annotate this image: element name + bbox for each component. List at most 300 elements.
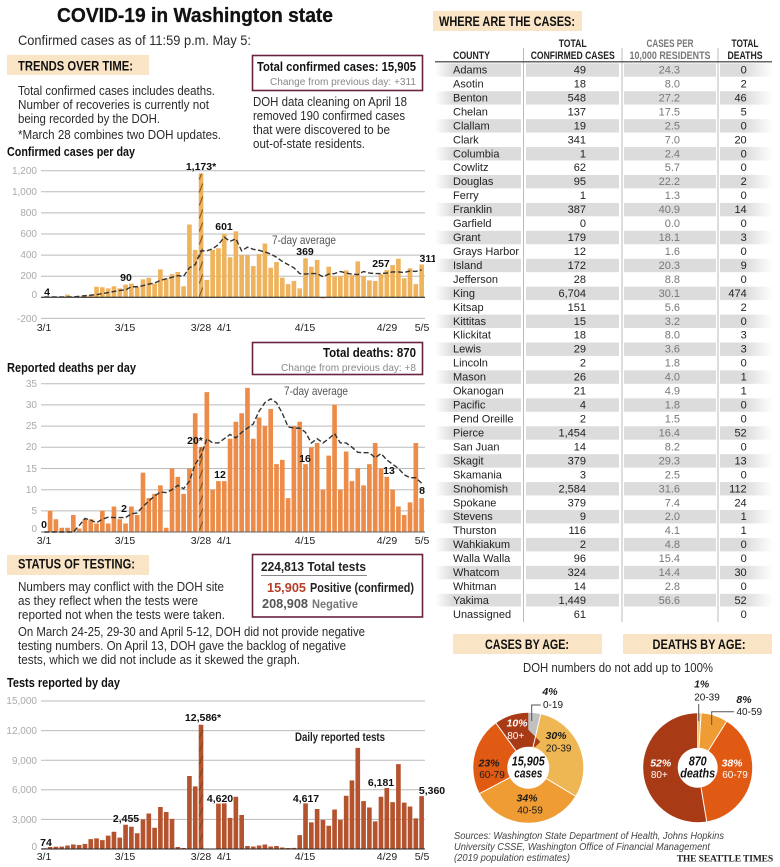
row: Clallam: Clallam <box>453 120 490 132</box>
row: Wahkiakum: 4.8 <box>665 539 680 551</box>
label: 30% 20-39: 30% <box>545 730 567 742</box>
note: DOH numbers: DOH numbers do not add up to 100% <box>523 661 713 675</box>
text block: trends notes <box>18 83 221 142</box>
label: 8% 40-59: 8% <box>736 694 752 706</box>
label: 23% 60-79: 23% <box>477 758 500 770</box>
row: Franklin: 14 <box>734 204 747 216</box>
table header: COUNTY <box>453 50 491 62</box>
text block: testing notes: On March 24-25, 29-30 and April 5-12, DOH did not provide negative <box>18 624 365 639</box>
heading: cases by age: CASES BY AGE: <box>485 636 569 652</box>
row: Lincoln: Lincoln <box>453 358 488 370</box>
row: Stevens: 1 <box>741 511 747 523</box>
row: Kittitas: 3.2 <box>665 316 680 328</box>
data labels: 90 <box>120 272 132 284</box>
label: 10% 80+: 80+ <box>507 731 524 742</box>
row: Ferry: 0 <box>741 190 747 202</box>
y axis labels: 15 <box>26 464 37 475</box>
row: Clark: Clark <box>453 134 479 146</box>
callout: total tests: 208,908 <box>262 596 308 611</box>
table: county data <box>435 38 773 622</box>
text block: DOH data cleaning: that were discovered to be <box>253 122 390 137</box>
row: Kitsap: 5.6 <box>665 302 680 314</box>
row: Garfield: 0 <box>580 218 586 230</box>
row: Columbia: 0 <box>741 148 747 160</box>
callout: total confirmed cases <box>252 56 422 90</box>
row: Kittitas <box>453 316 747 328</box>
leader line: 40-59 <box>712 712 734 725</box>
row: Stevens: Stevens <box>453 511 493 523</box>
row: Adams <box>453 64 747 76</box>
text block: testing notes: reported not when the tests were taken. <box>18 607 225 622</box>
row: Asotin: Asotin <box>453 78 484 90</box>
row: Lincoln: 1.8 <box>665 358 680 370</box>
row: Okanogan: 21 <box>574 386 586 398</box>
row: Grays Harbor: Grays Harbor <box>453 246 519 258</box>
row: Lincoln: 2 <box>580 358 586 370</box>
y axis labels: 9,000 <box>12 756 37 767</box>
label: 34% 40-59 <box>516 793 543 817</box>
text block: testing notes: tests, which we did not include as it skewed the graph. <box>18 652 300 667</box>
chart heading: tests reported by day: Tests reported by day <box>7 675 121 690</box>
row: Stevens: 9 <box>580 511 586 523</box>
row: Columbia <box>453 148 747 160</box>
data labels: 6,181 <box>368 777 394 789</box>
row: Kitsap: Kitsap <box>453 302 484 314</box>
data labels: 4,617 <box>293 793 319 805</box>
row: Whatcom: Whatcom <box>453 567 499 579</box>
row: Yakima: 56.6 <box>659 595 680 607</box>
row: Kittitas: 15 <box>574 316 586 328</box>
row: Adams: Adams <box>453 64 488 76</box>
row: Pacific: 4 <box>580 400 586 412</box>
source note: (2019 population estimates) <box>454 852 570 864</box>
row: Pacific: 0 <box>741 400 747 412</box>
row: Ferry: 1 <box>580 190 586 202</box>
callout: total tests: Positive (confirmed) <box>310 581 414 595</box>
row: Wahkiakum: Wahkiakum <box>453 539 510 551</box>
row: Skamania: 3 <box>580 469 586 481</box>
heading: trends over time: TRENDS OVER TIME: <box>18 58 133 74</box>
row: Island: 172 <box>568 260 586 272</box>
data labels: 601 <box>215 221 233 233</box>
y axis labels: 1,200 <box>12 166 37 177</box>
callout: total deaths <box>252 342 422 374</box>
row: Garfield <box>453 218 747 230</box>
row: Grant: 18.1 <box>659 232 680 244</box>
bars <box>50 388 422 532</box>
row: Chelan <box>453 106 747 118</box>
row: Whitman <box>453 581 747 593</box>
row: Benton: 46 <box>734 92 747 104</box>
row: Franklin: 40.9 <box>659 204 680 216</box>
data labels: 4,620 <box>207 793 233 805</box>
row: Whitman: 0 <box>741 581 747 593</box>
row: Whitman: Whitman <box>453 581 496 593</box>
y axis labels: 15,000 <box>6 696 37 707</box>
row: Douglas: 2 <box>741 176 747 188</box>
row: San Juan: 14 <box>574 441 586 453</box>
table header: CASES PER <box>646 38 694 50</box>
row: King: 30.1 <box>659 288 680 300</box>
row: Stevens <box>453 511 747 523</box>
data labels: 8 <box>419 485 425 497</box>
row: Pierce: 1,454 <box>558 428 586 440</box>
center label: 15,905 cases: 15,905 <box>512 755 546 769</box>
row: Okanogan: Okanogan <box>453 386 504 398</box>
row: Yakima: 52 <box>734 595 747 607</box>
row: Pierce: 16.4 <box>659 428 680 440</box>
7-day average line <box>44 399 422 532</box>
x axis labels: 4/1 <box>217 322 231 334</box>
row: Benton: 548 <box>568 92 586 104</box>
row: Lewis: 29 <box>574 344 586 356</box>
chart heading: confirmed cases per day: Confirmed cases per day <box>7 144 136 159</box>
heading: status of testing <box>7 555 149 575</box>
x axis labels: 4/15 <box>295 851 315 863</box>
label: 4% 0-19: 0-19 <box>543 700 563 711</box>
title: COVID-19 in Washington state <box>57 4 333 27</box>
row: Mason: 26 <box>574 372 586 384</box>
table header: 10,000 RESIDENTS <box>630 50 710 62</box>
heading: where are the cases <box>433 11 582 31</box>
label: 8% 40-59 <box>736 694 763 718</box>
credit: The Seattle Times: THE SEATTLE TIMES <box>677 855 773 865</box>
table header: TOTAL <box>732 38 759 50</box>
data labels: 74 <box>40 837 52 849</box>
leader line: 0-19 <box>532 705 541 721</box>
label: 30% 20-39 <box>545 730 572 755</box>
callout: total deaths: Total deaths: 870 <box>323 345 416 360</box>
row: Asotin: 8.0 <box>665 78 680 90</box>
row: Clallam: 0 <box>741 120 747 132</box>
center label: 15,905 cases <box>512 755 546 781</box>
row: Clark: 7.0 <box>665 134 680 146</box>
row: Pierce <box>453 428 747 440</box>
data labels: 0 <box>41 519 47 531</box>
heading: trends over time <box>7 55 149 75</box>
subtitle: Confirmed cases as of 11:59 p.m. May 5: <box>18 32 251 48</box>
row: Cowlitz: 62 <box>574 162 586 174</box>
row: Unassigned <box>453 609 747 621</box>
row: San Juan: 8.2 <box>665 441 680 453</box>
data labels: 2,455 <box>113 813 139 825</box>
row: Yakima: Yakima <box>453 595 490 607</box>
row: Grays Harbor: 12 <box>574 246 586 258</box>
row: Lewis: 3 <box>741 344 747 356</box>
row: Unassigned: 61 <box>574 609 586 621</box>
bars <box>44 174 422 298</box>
row: Stevens: 2.0 <box>665 511 680 523</box>
row: Pend Oreille: 2 <box>580 414 586 426</box>
label: 34% 40-59: 40-59 <box>517 806 543 817</box>
heading: deaths by age: DEATHS BY AGE: <box>652 636 746 652</box>
row: Clark <box>453 134 747 146</box>
label: 52% 80+: 52% <box>650 758 672 770</box>
row: Klickitat: 18 <box>574 330 586 342</box>
row: Island: 20.3 <box>659 260 680 272</box>
row: Kittitas: Kittitas <box>453 316 487 328</box>
y axis labels: 12,000 <box>6 726 37 737</box>
row: Benton <box>453 92 747 104</box>
row: San Juan: San Juan <box>453 441 499 453</box>
row: Columbia: Columbia <box>453 148 500 160</box>
row: Mason <box>453 372 747 384</box>
row: Thurston: 1 <box>741 525 747 537</box>
row: Jefferson: Jefferson <box>453 274 498 286</box>
row: Grays Harbor: 0 <box>741 246 747 258</box>
row: San Juan <box>453 441 747 453</box>
y axis labels: 10 <box>26 485 37 496</box>
row: Clallam: 19 <box>574 120 586 132</box>
row: Chelan: 5 <box>741 106 747 118</box>
row: Whatcom: 30 <box>734 567 747 579</box>
data labels: 1,173* <box>186 161 217 173</box>
leader line: 20-39 <box>698 704 700 721</box>
row: Spokane <box>453 497 747 509</box>
callout: total tests <box>252 554 422 617</box>
row: Whitman: 14 <box>574 581 586 593</box>
y axis labels: 5 <box>31 506 37 517</box>
y axis labels: 25 <box>26 421 37 432</box>
y axis labels: 0 <box>31 290 37 301</box>
row: Island <box>453 260 747 272</box>
row: Skamania: 0 <box>741 469 747 481</box>
x axis labels: 4/15 <box>295 322 315 334</box>
row: Pacific <box>453 400 747 412</box>
row: Mason: 4.0 <box>665 372 680 384</box>
row: Wahkiakum: 0 <box>741 539 747 551</box>
x axis labels: 3/15 <box>115 322 135 334</box>
y axis labels <box>6 696 37 853</box>
center label: 870 deaths <box>680 755 715 781</box>
center label: 870 deaths: deaths <box>680 767 715 781</box>
callout: total tests: Negative <box>312 597 358 611</box>
row: Jefferson <box>453 274 747 286</box>
row: Skagit: 379 <box>568 455 586 467</box>
row: Douglas <box>453 176 747 188</box>
row: Columbia: 1 <box>580 148 586 160</box>
row: Okanogan: 4.9 <box>665 386 680 398</box>
row: Spokane: Spokane <box>453 497 496 509</box>
data labels: 16 <box>299 453 311 465</box>
row: Grays Harbor: 1.6 <box>665 246 680 258</box>
row: Skagit <box>453 455 747 467</box>
table header: CONFIRMED CASES <box>531 50 615 62</box>
text block: trends notes: Number of recoveries is currently not <box>18 97 209 112</box>
row: Adams: 49 <box>574 64 586 76</box>
x axis labels: 4/29 <box>377 535 397 547</box>
row: Cowlitz: 0 <box>741 162 747 174</box>
row: Clark: 20 <box>734 134 747 146</box>
heading: where are the cases: WHERE ARE THE CASES: <box>439 13 575 29</box>
row: Snohomish: 2,584 <box>558 483 586 495</box>
y axis labels <box>12 166 37 325</box>
text block: testing notes: testing numbers. On April 13, DOH gave the backlog of negative <box>18 638 346 653</box>
row: Spokane: 7.4 <box>665 497 680 509</box>
row: Lewis: 3.6 <box>665 344 680 356</box>
row: Walla Walla: 96 <box>574 553 586 565</box>
row: Adams: 24.3 <box>659 64 680 76</box>
row: Wahkiakum: 2 <box>580 539 586 551</box>
text block: testing notes <box>18 579 365 667</box>
label: 23% 60-79 <box>477 758 505 781</box>
row: Asotin: 18 <box>574 78 586 90</box>
row: Yakima: 1,449 <box>558 595 586 607</box>
y axis labels: 30 <box>26 400 37 411</box>
row: Yakima <box>453 595 747 607</box>
row: Pend Oreille <box>453 414 747 426</box>
row: Skamania <box>453 469 747 481</box>
row: Snohomish: Snohomish <box>453 483 508 495</box>
row: Grant <box>453 232 747 244</box>
row: Spokane: 379 <box>568 497 586 509</box>
row: Skamania: Skamania <box>453 469 503 481</box>
row: Kitsap <box>453 302 747 314</box>
row: Island: Island <box>453 260 482 272</box>
row: Chelan: 17.5 <box>659 106 680 118</box>
label: 23% 60-79: 60-79 <box>479 770 505 781</box>
label: 1% 20-39 <box>694 679 720 703</box>
row: Asotin <box>453 78 747 90</box>
row: Cowlitz: 5.7 <box>665 162 680 174</box>
row: Whitman: 2.8 <box>665 581 680 593</box>
row: Okanogan <box>453 386 747 398</box>
label: 7-day average: 7-day average <box>284 384 348 398</box>
row: Garfield: Garfield <box>453 218 492 230</box>
row: Franklin: Franklin <box>453 204 492 216</box>
row: Garfield: 0.0 <box>665 218 680 230</box>
label: 38% 60-79: 38% <box>721 758 743 770</box>
row: Skamania: 2.5 <box>665 469 680 481</box>
row: Whatcom <box>453 567 747 579</box>
source note: Sources: Washington State Department of Health, Johns Hopkins <box>454 830 725 842</box>
bars <box>44 725 422 849</box>
table header: TOTAL <box>559 38 587 50</box>
y axis labels: 400 <box>20 250 37 261</box>
table header <box>453 38 762 62</box>
callout: total deaths: Change from previous day: +8 <box>281 362 416 374</box>
x axis labels: 5/5 <box>415 535 429 547</box>
row: Jefferson: 0 <box>741 274 747 286</box>
chart heading: reported deaths per day: Reported deaths per day <box>7 360 137 375</box>
text block: trends notes: being recorded by the DOH. <box>18 111 160 126</box>
x axis labels: 3/28 <box>191 322 211 334</box>
y axis labels: 200 <box>20 271 37 282</box>
text block: DOH data cleaning <box>253 94 407 151</box>
text block: DOH data cleaning: removed 190 confirmed cases <box>253 108 405 123</box>
row: King: 6,704 <box>558 288 586 300</box>
x axis labels: 3/15 <box>115 851 135 863</box>
text block: testing notes: as they reflect when the tests were <box>18 593 198 608</box>
row: Clallam: 2.5 <box>665 120 680 132</box>
row: Thurston: 4.1 <box>665 525 680 537</box>
x axis labels: 5/5 <box>415 851 429 863</box>
row: Asotin: 2 <box>741 78 747 90</box>
row: Jefferson: 8.8 <box>665 274 680 286</box>
x axis labels: 4/29 <box>377 851 397 863</box>
row: Cowlitz: Cowlitz <box>453 162 488 174</box>
label: 38% 60-79 <box>721 758 748 781</box>
data labels: 369 <box>296 246 314 258</box>
row: Walla Walla <box>453 553 747 565</box>
row: Thurston <box>453 525 747 537</box>
row: Snohomish: 31.6 <box>659 483 680 495</box>
label: 10% 80+ <box>506 718 528 742</box>
heading: cases by age <box>453 634 602 654</box>
row: Columbia: 2.4 <box>665 148 680 160</box>
row: Benton: Benton <box>453 92 488 104</box>
row: Pacific: 1.8 <box>665 400 680 412</box>
row: Thurston: 116 <box>568 525 586 537</box>
row: Whatcom: 14.4 <box>659 567 680 579</box>
label: 1% 20-39: 20-39 <box>694 692 720 703</box>
callout: total confirmed cases: Total confirmed cases: 15,905 <box>257 59 416 74</box>
data labels: 311 <box>420 253 437 265</box>
table header: DEATHS <box>728 50 762 62</box>
callout: total tests: 224,813 Total tests <box>261 559 366 574</box>
row: Okanogan: 1 <box>741 386 747 398</box>
row: Klickitat <box>453 330 747 342</box>
data labels: 2 <box>121 503 127 515</box>
row: Douglas: 95 <box>574 176 586 188</box>
center label: 15,905 cases: cases <box>514 767 542 781</box>
callout: total tests: 15,905 <box>267 580 306 595</box>
row: Klickitat: 8.0 <box>665 330 680 342</box>
x axis labels: 3/1 <box>37 535 51 547</box>
label: 1% 20-39: 1% <box>694 679 710 691</box>
text block: testing notes: Numbers may conflict with the DOH site <box>18 579 224 594</box>
heading: status of testing: STATUS OF TESTING: <box>18 556 135 572</box>
source note <box>454 830 725 864</box>
row: Lincoln <box>453 358 747 370</box>
row: Kitsap: 2 <box>741 302 747 314</box>
7-day average line <box>44 237 422 297</box>
row: Thurston: Thurston <box>453 525 496 537</box>
y axis labels: 1,000 <box>12 187 37 198</box>
x axis labels <box>37 322 429 334</box>
chart: reported deaths per day <box>26 379 429 547</box>
row: Garfield: 0 <box>741 218 747 230</box>
data labels: 4 <box>44 286 50 298</box>
row: Skagit: 13 <box>734 455 747 467</box>
data labels <box>41 435 425 531</box>
row: Grant: 179 <box>568 232 586 244</box>
y axis labels: 0 <box>31 524 37 535</box>
row: Clallam <box>453 120 747 132</box>
y axis labels: 800 <box>20 208 37 219</box>
row: Kitsap: 151 <box>568 302 586 314</box>
row: Klickitat: 3 <box>741 330 747 342</box>
row: Whatcom: 324 <box>568 567 586 579</box>
row: Wahkiakum <box>453 539 747 551</box>
y axis labels: 600 <box>20 229 37 240</box>
row: Pacific: Pacific <box>453 400 486 412</box>
row: Walla Walla: Walla Walla <box>453 553 511 565</box>
x axis labels: 3/28 <box>191 851 211 863</box>
data labels: 12,586* <box>185 712 222 724</box>
row: Unassigned: Unassigned <box>453 609 511 621</box>
text block: DOH data cleaning: out-of-state residents. <box>253 136 365 151</box>
row: Lincoln: 0 <box>741 358 747 370</box>
row: Ferry: Ferry <box>453 190 479 202</box>
label: 4% 0-19 <box>541 686 563 711</box>
y axis labels: 6,000 <box>12 785 37 796</box>
x axis labels <box>37 851 429 863</box>
row: Skagit: Skagit <box>453 455 484 467</box>
data labels <box>40 712 445 849</box>
row: Pierce: 52 <box>734 428 747 440</box>
label: 30% 20-39: 20-39 <box>546 744 572 755</box>
